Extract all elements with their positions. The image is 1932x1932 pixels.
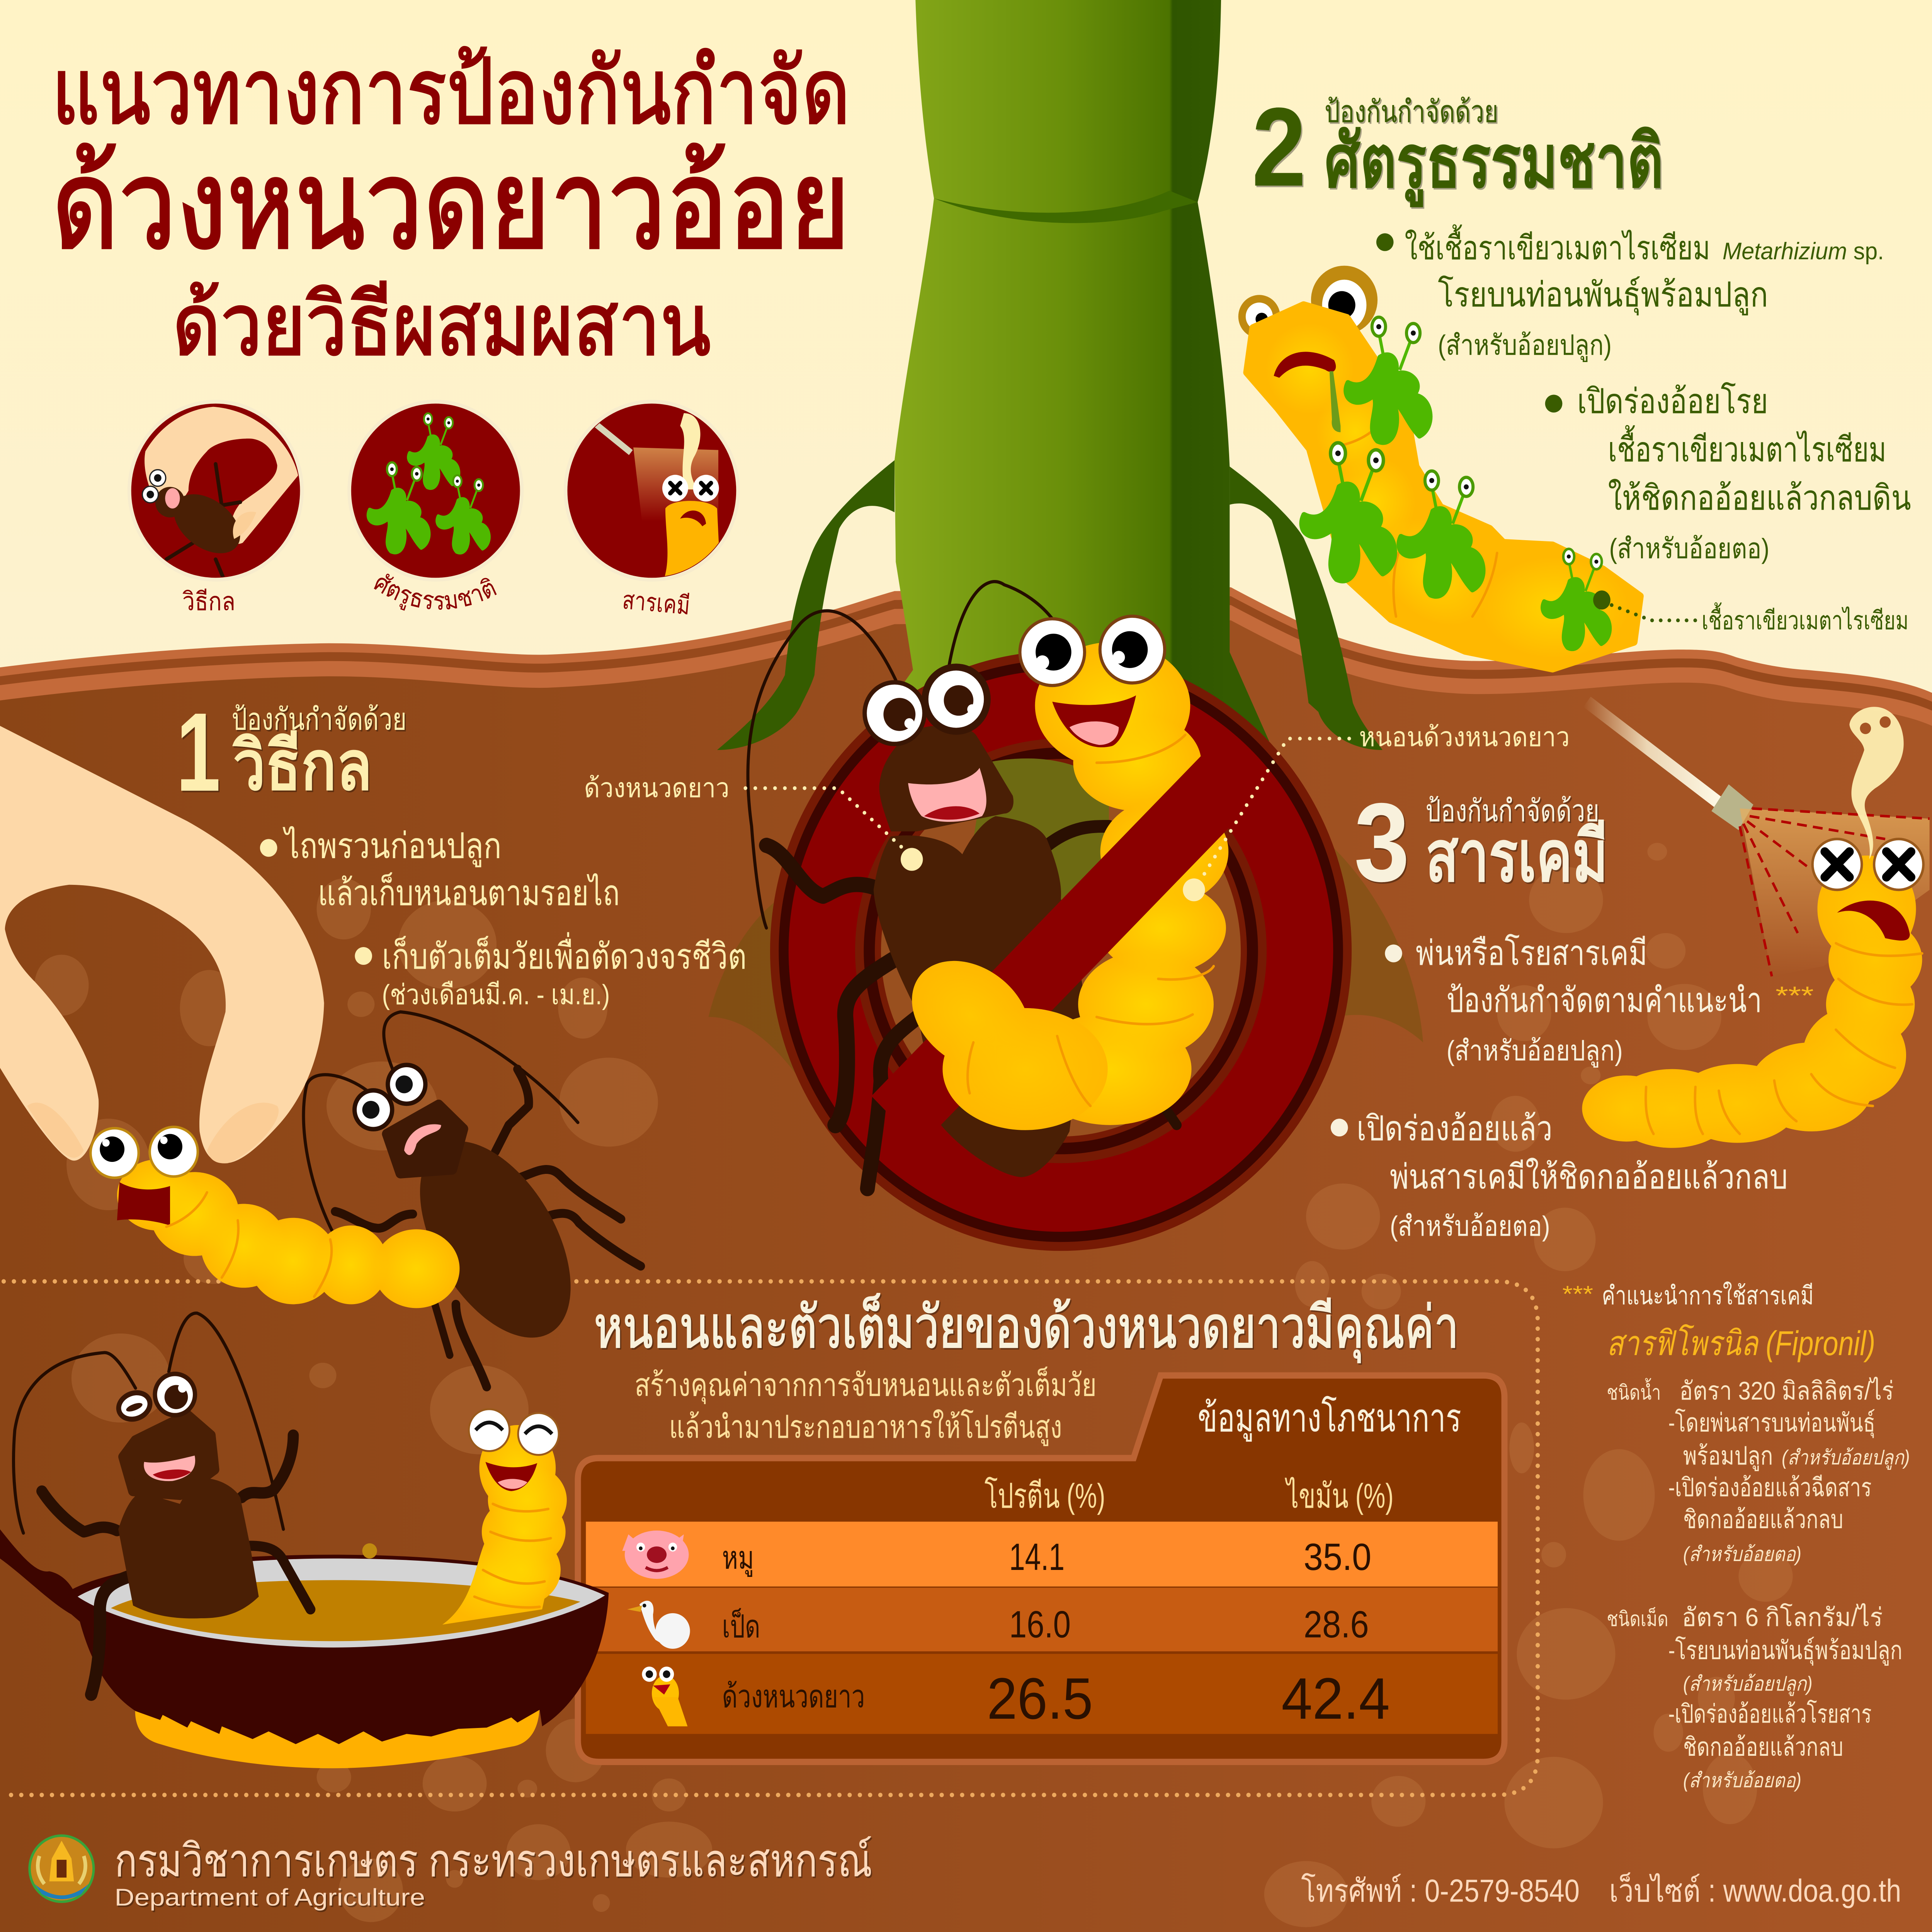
chemical recommendation notes: -โดยพ่นสารบนท่อนพันธุ์ bbox=[1668, 1408, 1875, 1439]
icon: pig bbox=[622, 1531, 689, 1579]
method icons bbox=[129, 402, 738, 620]
section 1 heading: ป้องกันกำจัดด้วย bbox=[231, 702, 406, 736]
row: duck bbox=[722, 1603, 1369, 1646]
chemical recommendation notes: คำแนะนำการใช้สารเคมี bbox=[1602, 1281, 1814, 1310]
section 1 heading: 1 bbox=[176, 690, 221, 815]
row: pork: 35.0 bbox=[1304, 1536, 1371, 1578]
footer contact: โทรศัพท์ : 0-2579-8540 bbox=[1301, 1873, 1580, 1909]
section 1 text: ไถพรวนก่อนปลูก bbox=[283, 826, 502, 867]
chemical recommendation notes: ชนิดเม็ด bbox=[1607, 1607, 1668, 1630]
footer organisation: Department of Agriculture bbox=[115, 1884, 425, 1911]
chemical recommendation notes: พร้อมปลูก bbox=[1683, 1441, 1773, 1471]
row: duck: เป็ด bbox=[722, 1608, 760, 1645]
chemical recommendation notes: (สำหรับอ้อยปลูก) bbox=[1683, 1672, 1813, 1696]
panel: nutrition value heading: หนอนและตัวเต็มวัยของด้วงหนวดยาวมีคุณค่า bbox=[594, 1293, 1459, 1363]
label: วิธีกล bbox=[182, 587, 235, 616]
section 3 text: เปิดร่องอ้อยแล้ว bbox=[1357, 1109, 1553, 1148]
section 2 text: ใช้เชื้อราเขียวเมตาไรเซียม bbox=[1405, 224, 1710, 266]
row: longhorn beetle: 26.5 bbox=[987, 1666, 1093, 1731]
section 2 heading: ป้องกันกำจัดด้วย bbox=[1325, 95, 1498, 129]
left root bbox=[717, 460, 895, 750]
callout: larva label bbox=[1183, 722, 1570, 901]
dotted frame bbox=[4, 1281, 1538, 1795]
chemical recommendation notes: -เปิดร่องอ้อยแล้วฉีดสาร bbox=[1668, 1473, 1872, 1502]
icon: natural enemies bbox=[349, 402, 522, 615]
chemical recommendation notes: ชนิดน้ำ bbox=[1607, 1378, 1661, 1404]
callout: beetle label bbox=[584, 773, 923, 871]
section 2 heading bbox=[1252, 85, 1663, 209]
section 3 heading: สารเคมี bbox=[1425, 817, 1608, 896]
chemical recommendation notes: อัตรา 6 กิโลกรัม/ไร่ bbox=[1682, 1603, 1883, 1631]
title: แนวทางการป้องกันกำจัด bbox=[52, 41, 850, 143]
footer organisation: กรมวิชาการเกษตร กระทรวงเกษตรและสหกรณ์ bbox=[115, 1835, 872, 1886]
chemical recommendation notes: สารฟิโพรนิล (Fipronil) bbox=[1607, 1324, 1875, 1362]
row: pork bbox=[722, 1536, 1371, 1578]
beetle centre bbox=[748, 582, 1177, 1189]
section 1 heading bbox=[176, 690, 406, 815]
section 3 text: ป้องกันกำจัดตามคำแนะนำ bbox=[1447, 981, 1762, 1019]
chemical recommendation notes: ชิดกออ้อยแล้วกลบ bbox=[1683, 1732, 1843, 1761]
poisoned larva bbox=[1582, 707, 1923, 1148]
row: duck: 16.0 bbox=[1009, 1603, 1071, 1646]
prohibition bar bbox=[896, 781, 1226, 1121]
sugarcane stalk bbox=[717, 0, 1383, 750]
icon: duck bbox=[627, 1601, 690, 1649]
right root bbox=[1230, 466, 1383, 750]
larva centre tail bbox=[891, 938, 1193, 1130]
chemical recommendation notes: (สำหรับอ้อยตอ) bbox=[1683, 1769, 1801, 1792]
column headers: ไขมัน (%) bbox=[1285, 1477, 1394, 1515]
column headers bbox=[985, 1477, 1394, 1515]
chemical recommendation notes: *** bbox=[1562, 1281, 1593, 1307]
row: pork: หมู bbox=[722, 1541, 754, 1577]
section 3 text bbox=[1331, 934, 1814, 1242]
prohibition sign bbox=[770, 651, 1352, 1251]
callout: beetle label: ด้วงหนวดยาว bbox=[584, 773, 730, 803]
chemical recommendation notes bbox=[1562, 1281, 1910, 1792]
row: longhorn beetle: ด้วงหนวดยาว bbox=[722, 1679, 865, 1714]
chemical recommendation notes: ชิดกออ้อยแล้วกลบ bbox=[1683, 1505, 1843, 1534]
section 3 text: พ่นสารเคมีให้ชิดกออ้อยแล้วกลบ bbox=[1390, 1158, 1788, 1196]
section 3 text: (สำหรับอ้อยปลูก) bbox=[1447, 1035, 1623, 1068]
value description: แล้วนำมาประกอบอาหารให้โปรตีนสูง bbox=[669, 1409, 1062, 1446]
chemical recommendation notes: อัตรา 320 มิลลิลิตร/ไร่ bbox=[1679, 1376, 1894, 1405]
section 3 text: *** bbox=[1776, 981, 1814, 1010]
section 2 text bbox=[1376, 224, 1911, 565]
table title: ข้อมูลทางโภชนาการ bbox=[1197, 1396, 1461, 1442]
footer contact bbox=[1301, 1872, 1901, 1909]
icon: larva bbox=[642, 1667, 687, 1726]
section 3 heading: ป้องกันกำจัดด้วย bbox=[1425, 794, 1599, 828]
column headers: โปรตีน (%) bbox=[985, 1477, 1105, 1515]
section 2 text: (สำหรับอ้อยตอ) bbox=[1609, 533, 1769, 565]
panel: nutrition table bbox=[578, 1376, 1504, 1762]
section 1 text: (ช่วงเดือนมี.ค. - เม.ย.) bbox=[382, 979, 610, 1010]
logo bbox=[30, 1836, 94, 1902]
chemical recommendation notes: -เปิดร่องอ้อยแล้วโรยสาร bbox=[1668, 1699, 1872, 1728]
callout: fungus label bbox=[1593, 590, 1908, 635]
section 3 heading: 3 bbox=[1354, 780, 1410, 905]
larva in pan bbox=[442, 1409, 567, 1625]
section 2 heading: 2 bbox=[1252, 85, 1306, 209]
icon: chemical bbox=[566, 402, 738, 620]
section 3 text: (สำหรับอ้อยตอ) bbox=[1390, 1211, 1550, 1242]
chemical recommendation notes: (สำหรับอ้อยปลูก) bbox=[1782, 1446, 1910, 1470]
title: ด้วงหนวดยาวอ้อย bbox=[52, 136, 850, 275]
frying pan bbox=[0, 1529, 609, 1768]
ghost bbox=[1849, 707, 1904, 859]
section 1 text bbox=[260, 826, 747, 1010]
flying beetle bbox=[303, 1012, 641, 1387]
section 2 text: เปิดร่องอ้อยโรย bbox=[1577, 382, 1768, 421]
flame bbox=[135, 1703, 540, 1768]
chemical recommendation notes: (สำหรับอ้อยตอ) bbox=[1683, 1543, 1801, 1565]
row: longhorn beetle bbox=[722, 1666, 1390, 1731]
section 2 heading: ศัตรูธรรมชาติ bbox=[1325, 120, 1663, 207]
icon: mechanical bbox=[129, 402, 302, 616]
larva under hand bbox=[90, 1127, 459, 1308]
row: duck: 28.6 bbox=[1304, 1603, 1369, 1646]
callout: larva label: หนอนด้วงหนวดยาว bbox=[1359, 722, 1570, 752]
row: longhorn beetle: 42.4 bbox=[1281, 1666, 1390, 1731]
section 3 heading bbox=[1354, 780, 1608, 905]
section 2 text: โรยบนท่อนพันธุ์พร้อมปลูก bbox=[1438, 276, 1768, 315]
infected larva bbox=[1238, 266, 1640, 668]
value description bbox=[634, 1366, 1097, 1446]
footer contact: เว็บไซต์ : www.doa.go.th bbox=[1609, 1872, 1901, 1909]
footer organisation bbox=[115, 1835, 872, 1911]
label: สารเคมี bbox=[621, 585, 691, 620]
section 2 text: (สำหรับอ้อยปลูก) bbox=[1438, 330, 1612, 362]
soil ground bbox=[0, 587, 1932, 1932]
beetle in pan bbox=[14, 1313, 311, 1694]
section 3 text: พ่นหรือโรยสารเคมี bbox=[1416, 934, 1647, 972]
title bbox=[52, 41, 850, 373]
larva centre body bbox=[1019, 615, 1228, 1125]
hand bbox=[0, 726, 324, 1163]
row: pork: 14.1 bbox=[1009, 1536, 1065, 1578]
title: ด้วยวิธีผสมผสาน bbox=[172, 277, 711, 373]
spray nozzle bbox=[1583, 697, 1930, 976]
section 1 heading: วิธีกล bbox=[232, 728, 372, 804]
eyes bbox=[1019, 615, 1166, 687]
section 2 text: Metarhizium sp. bbox=[1723, 238, 1884, 265]
value description: สร้างคุณค่าจากการจับหนอนและตัวเต็มวัย bbox=[634, 1366, 1097, 1405]
icon: natural enemies: ศัตรูธรรมชาติ bbox=[369, 568, 500, 615]
section 1 text: เก็บตัวเต็มวัยเพื่อตัดวงจรชีวิต bbox=[382, 932, 747, 976]
section 1 text: แล้วเก็บหนอนตามรอยไถ bbox=[318, 872, 620, 913]
label bbox=[372, 587, 500, 610]
